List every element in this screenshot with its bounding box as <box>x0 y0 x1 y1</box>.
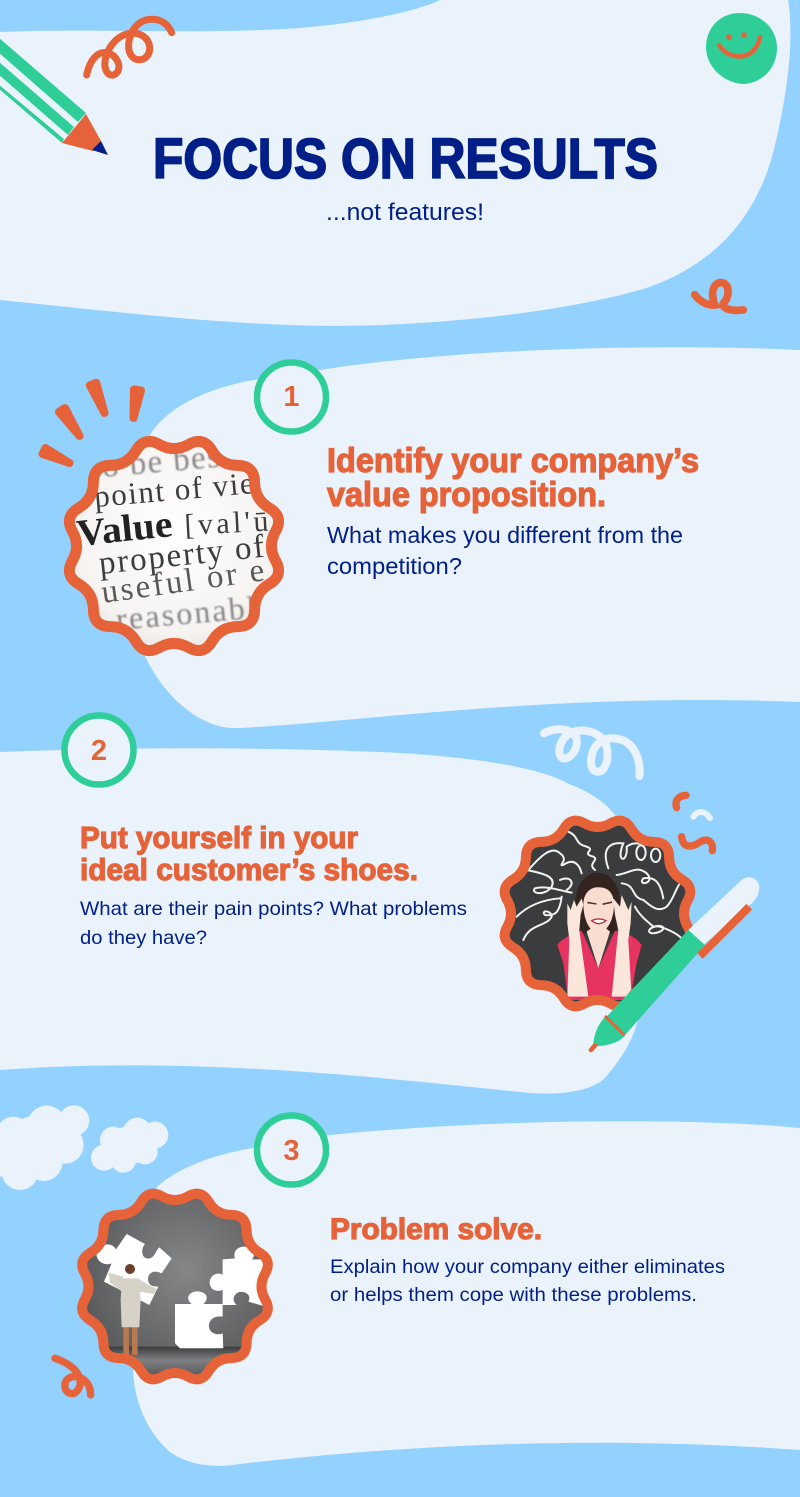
heading: step 1: value proposition. <box>327 476 606 514</box>
photo: dictionary value: property of <box>97 529 266 582</box>
heading: step 3: Problem solve. <box>330 1213 542 1246</box>
icon: clouds <box>0 1105 168 1190</box>
icon: smiley <box>706 13 777 84</box>
panel: step 2 blob <box>0 748 650 1094</box>
text: step 3 body: Explain how your company either eliminates <box>330 1256 725 1278</box>
heading: step 2: ideal customer’s shoes. <box>80 852 418 887</box>
floor <box>109 1346 241 1372</box>
panel: header blob <box>0 0 790 326</box>
step number 2 <box>64 716 134 784</box>
chalk squiggles <box>517 832 682 940</box>
heading: step 1 <box>327 442 699 514</box>
icon: burst rays <box>42 383 141 463</box>
photo: dictionary value: o be bes <box>101 439 221 485</box>
photo: stressed woman <box>495 810 700 1015</box>
step number 1: 1 <box>283 381 300 413</box>
photo: dictionary value <box>60 430 290 660</box>
panel: step 1 blob <box>130 347 800 728</box>
text: step 3 body <box>330 1256 725 1306</box>
person <box>575 873 621 933</box>
text: step 1 body: What makes you different from the <box>327 522 683 548</box>
photo: dictionary value: useful or e <box>99 552 267 611</box>
step number 3: 3 <box>283 1135 300 1167</box>
step number 1 <box>257 362 326 432</box>
text: step 2 body: do they have? <box>80 927 207 949</box>
photo: dictionary value: Value <box>75 503 174 555</box>
heading: step 2 <box>80 820 418 887</box>
step number 3 <box>257 1116 326 1184</box>
text: step 1 body: competition? <box>327 553 462 579</box>
photo: dictionary value: point of vie <box>93 465 255 514</box>
icon: small dashes <box>676 795 713 851</box>
text: step 3 body: or helps them cope with these problems. <box>330 1284 697 1306</box>
text: step 2 body: What are their pain points? What problems <box>80 898 467 920</box>
heading: step 2: Put yourself in your <box>80 820 358 855</box>
icon: white spiral <box>544 729 640 776</box>
heading: step 1: Identify your company’s <box>327 442 699 480</box>
icon: pencil <box>0 37 108 155</box>
step number 2: 2 <box>91 735 107 767</box>
title: FOCUS ON RESULTS <box>153 127 658 191</box>
panel: step 3 blob <box>133 1121 800 1466</box>
photo: dictionary value: [val'ū <box>184 505 269 542</box>
subtitle: ...not features! <box>326 199 484 226</box>
icon: pen <box>591 877 759 1050</box>
text: step 2 body <box>80 898 467 949</box>
icon: orange squiggle right <box>695 283 743 310</box>
icon: orange spiral top <box>87 19 172 75</box>
woman <box>123 1325 129 1355</box>
icon: orange squiggle bottom <box>55 1358 91 1395</box>
photo: dictionary value: reasonabl <box>114 589 257 637</box>
photo: puzzle pieces <box>77 1188 273 1384</box>
text: step 1 body <box>327 522 683 579</box>
puzzle pieces <box>96 1234 263 1348</box>
